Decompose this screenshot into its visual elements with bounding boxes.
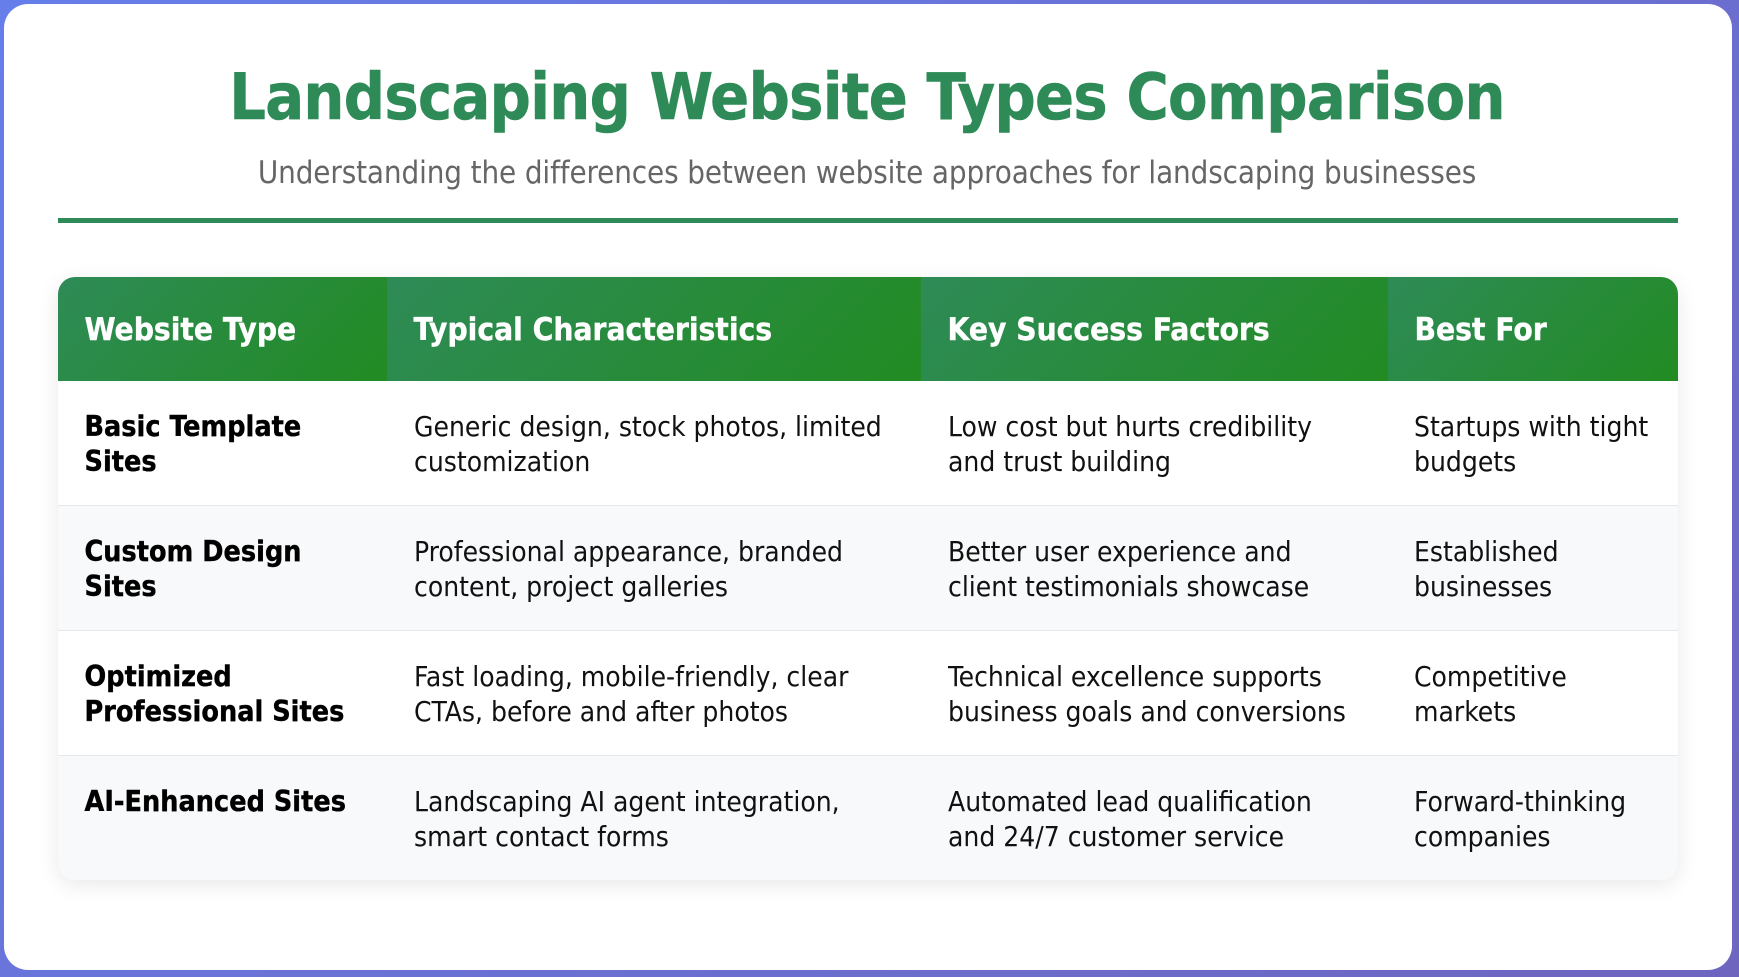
row: AI-Enhanced Sites (58, 756, 1678, 881)
row: Optimized Professional Sites (58, 631, 1678, 756)
row: Custom Design Sites: Custom Design (84, 535, 302, 568)
row: Optimized Professional Sites: CTAs, before and after photos (414, 695, 788, 728)
row: Basic Template Sites: Generic design, stock photos, limited (414, 410, 882, 443)
header cell: Key Success Factors: Key Success Factors (948, 312, 1270, 348)
header cell: Typical Characteristics (387, 277, 921, 381)
row: Custom Design Sites: Established (1414, 535, 1559, 568)
row: Custom Design Sites: Sites (84, 570, 157, 603)
subtitle: Understanding the differences between website approaches for landscaping businesses (258, 155, 1476, 191)
row: Optimized Professional Sites: Professional Sites (84, 695, 344, 728)
row: AI-Enhanced Sites: Automated lead qualification (948, 785, 1312, 818)
header cell: Best For: Best For (1414, 312, 1547, 348)
row: Custom Design Sites: businesses (1414, 570, 1552, 603)
row: Basic Template Sites: Low cost but hurts credibility (948, 410, 1312, 443)
row: Basic Template Sites: and trust building (948, 445, 1171, 478)
title: Landscaping Website Types Comparison (229, 61, 1505, 135)
row: AI-Enhanced Sites: smart contact forms (414, 820, 669, 853)
row: Optimized Professional Sites: Optimized (84, 660, 232, 693)
row: Optimized Professional Sites: Fast loading, mobile-friendly, clear (414, 660, 848, 693)
row: Custom Design Sites: content, project galleries (414, 570, 728, 603)
header cell: Best For (1388, 277, 1678, 381)
title divider (58, 218, 1678, 223)
row: Basic Template Sites: Sites (84, 445, 157, 478)
row: Basic Template Sites: Startups with tight (1414, 410, 1648, 443)
row: Basic Template Sites: customization (414, 445, 590, 478)
row: Basic Template Sites: Basic Template (84, 410, 301, 443)
row: Basic Template Sites (58, 381, 1678, 506)
row: AI-Enhanced Sites: Landscaping AI agent integration, (414, 785, 840, 818)
row: Basic Template Sites: budgets (1414, 445, 1516, 478)
header cell: Website Type (58, 277, 387, 381)
row: AI-Enhanced Sites: and 24/7 customer service (948, 820, 1284, 853)
row: AI-Enhanced Sites: AI-Enhanced Sites (84, 785, 346, 818)
row: AI-Enhanced Sites: companies (1414, 820, 1551, 853)
row: Custom Design Sites: Professional appearance, branded (414, 535, 843, 568)
row: Optimized Professional Sites: Competitive (1414, 660, 1567, 693)
header cell: Website Type: Website Type (84, 312, 296, 348)
row: Custom Design Sites: client testimonials showcase (948, 570, 1309, 603)
row: Optimized Professional Sites: markets (1414, 695, 1516, 728)
row: Custom Design Sites: Better user experience and (948, 535, 1292, 568)
header cell: Typical Characteristics: Typical Characteristics (414, 312, 772, 348)
row: Optimized Professional Sites: business goals and conversions (948, 695, 1346, 728)
comparison table (58, 277, 1678, 880)
header cell: Key Success Factors (921, 277, 1388, 381)
row: AI-Enhanced Sites: Forward-thinking (1414, 785, 1626, 818)
row: Custom Design Sites (58, 506, 1678, 631)
row: Optimized Professional Sites: Technical excellence supports (948, 660, 1322, 693)
